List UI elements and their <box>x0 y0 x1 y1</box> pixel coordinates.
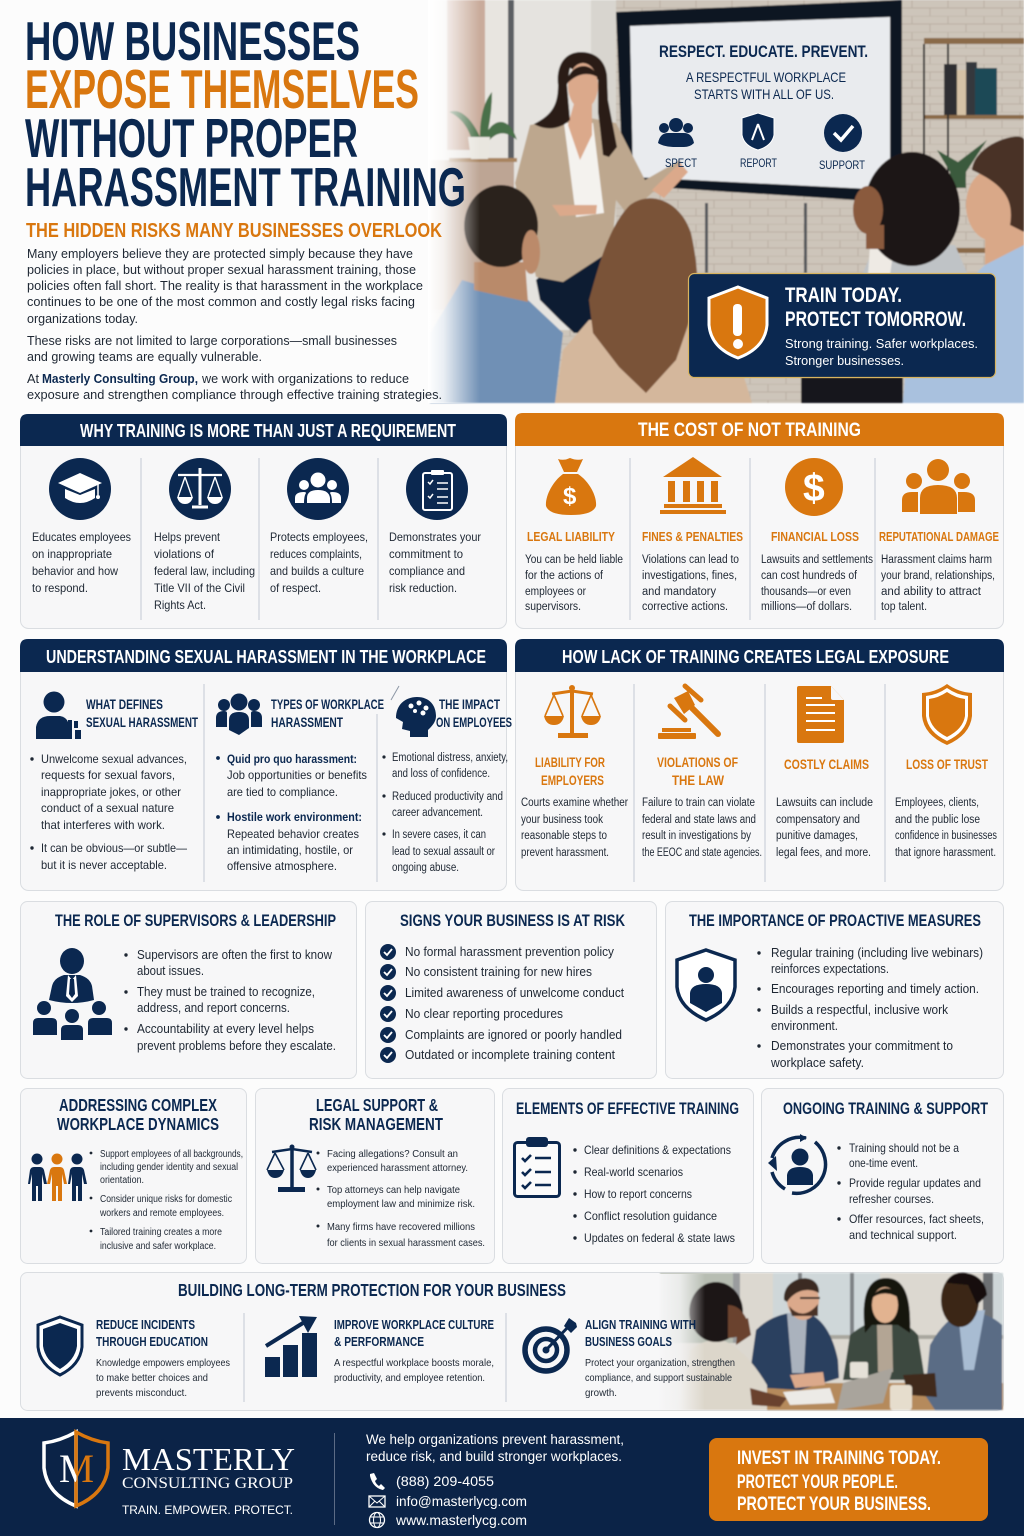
text blocks: Educates employees <box>32 530 131 544</box>
subheadings: HARASSMENT <box>271 715 344 730</box>
screen text and icons: STARTS WITH ALL OF US. <box>694 86 834 102</box>
icon: head with brain <box>396 697 436 737</box>
impact bullets: and loss of confidence. <box>392 768 490 780</box>
text blocks: confidence in businesses <box>895 830 997 842</box>
intro text: exposure and strengthen compliance through effective training strategies. <box>27 387 442 402</box>
harassment type bullets <box>216 752 367 873</box>
bullets: Tailored training creates a more <box>100 1227 222 1238</box>
audience: man on left <box>430 280 563 403</box>
heading: RISK MANAGEMENT <box>309 1114 443 1134</box>
icon: people <box>287 458 349 520</box>
bullets: Accountability at every level helps <box>137 1022 314 1036</box>
icon: target with arrow <box>525 1318 577 1371</box>
block: improve workplace culture: IMPROVE WORKPLACE CULTURE <box>334 1317 494 1332</box>
text blocks: your business took <box>521 814 603 826</box>
contact: email: info@masterlycg.com <box>396 1493 527 1509</box>
item titles: LOSS OF TRUST <box>906 757 989 772</box>
bullets: Regular training (including live webinars) <box>771 946 983 960</box>
panel: ongoing training and support <box>762 1088 1004 1264</box>
bullets: orientation. <box>100 1175 144 1186</box>
icon: circular arrows and person <box>768 1134 826 1193</box>
heading: ELEMENTS OF EFFECTIVE TRAINING <box>516 1099 739 1118</box>
text blocks: your brand, relationships, <box>881 570 995 582</box>
heading: THE ROLE OF SUPERVISORS & LEADERSHIP <box>55 911 336 930</box>
text blocks: legal fees, and more. <box>776 847 871 859</box>
bullets: Supervisors are often the first to know <box>137 948 333 962</box>
item titles: COSTLY CLAIMS <box>784 757 869 772</box>
item titles: VIOLATIONS OF <box>657 755 738 770</box>
title: WITHOUT PROPER <box>25 107 358 169</box>
panel: role of supervisors and leadership <box>20 902 356 1078</box>
item titles: FINANCIAL LOSS <box>771 529 859 544</box>
text blocks: thousands—or even <box>761 586 851 598</box>
presenter <box>536 213 612 333</box>
bullets: and technical support. <box>849 1228 957 1242</box>
screen text and icons: RESPECT. EDUCATE. PREVENT. <box>659 42 868 61</box>
definition bullets: Unwelcome sexual advances, <box>41 752 187 766</box>
impact bullets: ongoing abuse. <box>392 862 459 874</box>
text blocks: federal law, including <box>154 564 255 578</box>
icon: dollar coin: $ <box>803 467 825 510</box>
icon: person <box>36 692 81 739</box>
block: reduce incidents: Knowledge empowers employees <box>96 1357 230 1369</box>
heading: SIGNS YOUR BUSINESS IS AT RISK <box>400 911 626 930</box>
icon: diverse people <box>28 1154 87 1201</box>
impact bullets: In severe cases, it can <box>392 829 486 841</box>
subheadings <box>86 697 512 730</box>
hero photo: presenter training a team <box>430 0 1024 403</box>
icon: navy scales <box>267 1144 316 1192</box>
heading <box>309 1095 443 1134</box>
call to action <box>709 1438 988 1521</box>
checklist <box>380 944 624 1063</box>
icon: money bag: $ <box>563 483 577 510</box>
heading: LEGAL SUPPORT & <box>316 1095 438 1115</box>
bullets: How to report concerns <box>584 1187 692 1201</box>
block: improve workplace culture: A respectful workplace boosts morale, <box>334 1357 494 1369</box>
text blocks: Helps prevent <box>154 530 221 544</box>
icon: graduation cap <box>49 458 111 520</box>
text blocks: and the public lose <box>895 814 980 826</box>
text blocks: Lawsuits can include <box>776 797 873 809</box>
screen text and icons: SUPPORT <box>819 158 866 172</box>
screen text and icons <box>658 42 868 172</box>
bullets <box>573 1143 735 1245</box>
callout: train today: PROTECT TOMORROW. <box>785 308 966 331</box>
intro text: At <box>27 371 39 386</box>
callout: train today: Stronger businesses. <box>785 353 904 368</box>
bullets: prevent problems before they escalate. <box>137 1039 336 1053</box>
icon: warning shield <box>709 287 767 358</box>
harassment type bullets: Job opportunities or benefits <box>227 768 367 782</box>
panel: why training is more than a requirement <box>20 414 507 628</box>
intro text: These risks are not limited to large corporations—small businesses <box>27 333 397 348</box>
panel: how lack of training creates legal exposure <box>515 639 1004 890</box>
impact bullets <box>382 752 508 874</box>
text blocks: Courts examine whether <box>521 797 628 809</box>
harassment type bullets: an intimidating, hostile, or <box>227 843 353 857</box>
icon: group <box>216 694 262 735</box>
intro text: continues to be one of the most common and costly legal risks facing <box>27 294 415 309</box>
logo wordmark: CONSULTING GROUP <box>122 1475 293 1492</box>
checklist: Limited awareness of unwelcome conduct <box>405 986 624 1000</box>
text blocks: prevent harassment. <box>521 847 609 859</box>
block: reduce incidents: prevents misconduct. <box>96 1387 187 1399</box>
bullets: reinforces expectations. <box>771 962 889 976</box>
text blocks: risk reduction. <box>389 581 457 595</box>
block: improve workplace culture: & PERFORMANCE <box>334 1334 424 1349</box>
icon: orange scales <box>544 685 601 738</box>
intro text <box>27 246 442 402</box>
intro text: Many employers believe they are protected simply because they have <box>27 246 413 261</box>
screen text and icons: SPECT <box>665 156 698 170</box>
bullets: Real-world scenarios <box>584 1165 683 1179</box>
audience: woman from behind <box>555 317 752 403</box>
logo wordmark: MASTERLY <box>122 1441 295 1477</box>
icon: orange shield <box>922 684 972 745</box>
text blocks: Failure to train can violate <box>642 797 755 809</box>
man in grey suit <box>925 1311 1002 1410</box>
panel: building long-term protection <box>20 1272 1004 1410</box>
bullets: including gender identity and sexual <box>100 1162 238 1173</box>
text blocks: federal and state laws and <box>642 814 756 826</box>
tagline <box>366 1432 624 1464</box>
text blocks: Rights Act. <box>154 598 206 612</box>
bullets: experienced harassment attorney. <box>327 1162 468 1174</box>
bullets: Consider unique risks for domestic <box>100 1194 232 1205</box>
tagline: We help organizations prevent harassment, <box>366 1432 624 1447</box>
text blocks: punitive damages, <box>776 830 858 842</box>
item titles: FINES & PENALTIES <box>642 529 743 544</box>
tagline: reduce risk, and build stronger workplaces. <box>366 1449 622 1464</box>
panel: importance of proactive measures <box>666 902 1004 1078</box>
bullets: Demonstrates your commitment to <box>771 1039 953 1053</box>
definition bullets: It can be obvious—or subtle— <box>41 841 187 855</box>
text blocks: Violations can lead to <box>642 554 739 566</box>
bullets: for clients in sexual harassment cases. <box>327 1237 485 1249</box>
text blocks: compliance and <box>389 564 465 578</box>
impact bullets: career advancement. <box>392 807 483 819</box>
bullets: Conflict resolution guidance <box>584 1209 717 1223</box>
impact bullets: Reduced productivity and <box>392 791 503 803</box>
panel: elements of effective training <box>502 1088 754 1264</box>
table items <box>783 1388 835 1405</box>
text blocks: reasonable steps to <box>521 830 607 842</box>
subheadings: SEXUAL HARASSMENT <box>86 715 199 730</box>
subheadings: ON EMPLOYEES <box>436 715 512 730</box>
icon: scales <box>169 458 231 520</box>
audience: woman with curly hair <box>862 245 968 275</box>
subheadings: TYPES OF WORKPLACE <box>271 697 384 712</box>
call to action: PROTECT YOUR PEOPLE. <box>737 1472 898 1493</box>
panel: understanding sexual harassment <box>20 639 512 890</box>
bullets: address, and report concerns. <box>137 1001 290 1015</box>
icon: clipboard checklist <box>514 1137 560 1196</box>
block: reduce incidents: REDUCE INCIDENTS <box>96 1317 195 1332</box>
bullets: employment law and minimize risk. <box>327 1198 475 1210</box>
intro text: we work with organizations to reduce <box>201 371 409 386</box>
block: align training: ALIGN TRAINING WITH <box>585 1317 696 1332</box>
checklist: No consistent training for new hires <box>405 965 592 979</box>
team meeting photo <box>660 1273 1003 1410</box>
bullets <box>757 946 983 1070</box>
icon: money bag <box>546 458 596 515</box>
text blocks: Lawsuits and settlements <box>761 554 873 566</box>
bullets <box>124 948 336 1053</box>
harassment type bullets: Repeated behavior creates <box>227 827 359 841</box>
text blocks: and builds a culture <box>270 564 364 578</box>
bullets: Training should not be a <box>849 1141 959 1155</box>
call to action: INVEST IN TRAINING TODAY. <box>737 1448 941 1469</box>
icon: shield <box>38 1317 82 1375</box>
text blocks: Harassment claims harm <box>881 554 992 566</box>
bullets: Builds a respectful, inclusive work <box>771 1003 949 1017</box>
bullets: They must be trained to recognize, <box>137 985 315 999</box>
definition bullets: inappropriate jokes, or other <box>41 785 181 799</box>
icon: bank <box>660 457 726 514</box>
heading: WHY TRAINING IS MORE THAN JUST A REQUIREMENT <box>80 421 456 441</box>
right shelves <box>924 38 1024 44</box>
checklist: Outdated or incomplete training content <box>405 1048 615 1062</box>
item titles: THE LAW <box>672 773 724 788</box>
checklist: No formal harassment prevention policy <box>405 945 615 959</box>
title <box>25 10 466 218</box>
impact bullets: lead to sexual assault or <box>392 846 495 858</box>
bullets: inclusive and safer workplace. <box>100 1241 216 1252</box>
text blocks: to respond. <box>32 581 88 595</box>
heading: ADDRESSING COMPLEX <box>59 1095 217 1115</box>
intro text: policies in place, but without proper sexual harassment training, those <box>27 262 416 277</box>
bullets: Many firms have recovered millions <box>327 1221 475 1233</box>
callout: train today: Strong training. Safer workplaces. <box>785 336 978 351</box>
icon: checklist <box>406 458 468 520</box>
text blocks: reduces complaints, <box>270 547 362 561</box>
plant on left shelf <box>449 92 517 142</box>
text blocks: for the actions of <box>525 570 604 582</box>
text blocks: millions—of dollars. <box>761 601 852 613</box>
man with glasses <box>748 1313 839 1390</box>
subheading: THE HIDDEN RISKS MANY BUSINESSES OVERLOOK <box>26 220 442 242</box>
text blocks: Protects employees, <box>270 530 368 544</box>
text blocks: Title VII of the Civil <box>154 581 245 595</box>
bullets: refresher courses. <box>849 1192 934 1206</box>
logo wordmark <box>122 1441 295 1517</box>
screen text and icons: A RESPECTFUL WORKPLACE <box>686 69 846 85</box>
item titles: EMPLOYERS <box>541 773 604 788</box>
bullets: about issues. <box>137 964 204 978</box>
bullets: Offer resources, fact sheets, <box>849 1212 984 1226</box>
block: align training: BUSINESS GOALS <box>585 1334 672 1349</box>
harassment type bullets: offensive atmosphere. <box>227 859 337 873</box>
bullets: Provide regular updates and <box>849 1176 981 1190</box>
bullets: Support employees of all backgrounds, <box>100 1149 243 1160</box>
icon: protected person shield <box>677 950 735 1020</box>
item titles <box>535 755 989 788</box>
block: align training <box>585 1317 735 1399</box>
text blocks <box>32 530 481 612</box>
bullets: environment. <box>771 1019 838 1033</box>
text blocks: result in investigations by <box>642 830 751 842</box>
text blocks: on inappropriate <box>32 547 112 561</box>
block: align training: Protect your organization, strengthen <box>585 1357 735 1369</box>
bullets <box>316 1148 485 1249</box>
intro text: organizations today. <box>27 311 138 326</box>
block: reduce incidents <box>96 1317 230 1399</box>
definition bullets: requests for sexual favors, <box>41 768 175 782</box>
text blocks: can cost hundreds of <box>761 570 858 582</box>
block: align training: growth. <box>585 1387 617 1399</box>
call to action: PROTECT YOUR BUSINESS. <box>737 1494 931 1515</box>
callout: train today: TRAIN TODAY. <box>785 284 902 307</box>
text blocks: behavior and how <box>32 564 118 578</box>
intro text: and growing teams are equally vulnerable. <box>27 349 262 364</box>
intro text: Masterly Consulting Group, <box>42 371 198 386</box>
harassment type bullets: Hostile work environment: <box>227 810 362 824</box>
heading: WORKPLACE DYNAMICS <box>57 1114 219 1134</box>
title: EXPOSE THEMSELVES <box>25 58 419 120</box>
bullets: workplace safety. <box>770 1056 864 1070</box>
subheadings: THE IMPACT <box>439 697 501 712</box>
text blocks: the EEOC and state agencies. <box>642 847 762 859</box>
text blocks: Demonstrates your <box>389 530 481 544</box>
bullets <box>837 1141 984 1242</box>
text blocks <box>525 554 995 613</box>
audience: man on right <box>903 238 1024 403</box>
woman with curly hair <box>677 1340 767 1410</box>
bullets: one-time event. <box>849 1156 918 1170</box>
text blocks: top talent. <box>881 601 927 613</box>
icon: gavel <box>658 686 718 739</box>
text blocks: that ignore harassment. <box>895 847 996 859</box>
heading: BUILDING LONG-TERM PROTECTION FOR YOUR BUSINESS <box>178 1280 566 1300</box>
title: HOW BUSINESSES <box>25 10 360 72</box>
item titles: LIABILITY FOR <box>535 755 605 770</box>
definition bullets <box>30 752 187 872</box>
checklist: Complaints are ignored or poorly handled <box>405 1028 622 1042</box>
text blocks: employees or <box>525 586 586 598</box>
bullets: Encourages reporting and timely action. <box>771 982 979 996</box>
block: improve workplace culture <box>334 1317 494 1384</box>
bullets: Updates on federal & state laws <box>584 1231 735 1245</box>
contact: web: www.masterlycg.com <box>395 1512 527 1528</box>
block: reduce incidents: to make better choices and <box>96 1372 208 1384</box>
panel: the cost of not training <box>515 413 1004 628</box>
subheadings: WHAT DEFINES <box>86 697 163 712</box>
icon: leader and team <box>33 948 112 1040</box>
block: reduce incidents: THROUGH EDUCATION <box>96 1334 208 1349</box>
heading: THE COST OF NOT TRAINING <box>638 420 861 441</box>
bullets: Facing allegations? Consult an <box>327 1148 458 1160</box>
bullets: workers and remote employees. <box>99 1208 224 1219</box>
item titles <box>527 529 999 544</box>
definition bullets: that interferes with work. <box>41 818 165 832</box>
title: HARASSMENT TRAINING <box>25 156 466 218</box>
block: align training: compliance, and support sustainable <box>585 1372 732 1384</box>
text blocks: and mandatory <box>642 586 716 598</box>
panel: addressing complex workplace dynamics <box>20 1088 246 1264</box>
text blocks: violations of <box>154 547 215 561</box>
text blocks <box>521 797 997 859</box>
logo shield: M <box>59 1446 94 1491</box>
screen text and icons: REPORT <box>740 156 777 170</box>
item titles: LEGAL LIABILITY <box>527 529 615 544</box>
text blocks: You can be held liable <box>525 554 623 566</box>
text blocks: and ability to attract <box>881 586 982 598</box>
text blocks: of respect. <box>270 581 321 595</box>
icon: growth chart <box>265 1316 317 1377</box>
heading: UNDERSTANDING SEXUAL HARASSMENT IN THE WORKPLACE <box>46 646 486 667</box>
bullets <box>90 1149 243 1252</box>
definition bullets: conduct of a sexual nature <box>41 801 174 815</box>
impact bullets: Emotional distress, anxiety, <box>392 752 508 764</box>
heading <box>57 1095 219 1134</box>
text blocks: supervisors. <box>525 601 581 613</box>
harassment type bullets: Quid pro quo harassment: <box>227 752 357 766</box>
photo fade <box>655 1274 705 1410</box>
text blocks: corrective actions. <box>642 601 728 613</box>
text blocks: compensatory and <box>776 814 860 826</box>
photo left fade <box>428 0 480 403</box>
icon: document <box>797 686 844 743</box>
contact: phone: (888) 209-4055 <box>396 1473 494 1489</box>
footer <box>0 1418 1024 1536</box>
definition bullets: but it is never acceptable. <box>41 858 167 872</box>
text blocks: investigations, fines, <box>642 570 737 582</box>
smiling woman <box>843 1320 925 1380</box>
intro text: policies often fall short. The reality is that harassment in the workplace <box>27 278 423 293</box>
bullets: Top attorneys can help navigate <box>327 1184 460 1196</box>
checklist: No clear reporting procedures <box>405 1007 563 1021</box>
bullets: Clear definitions & expectations <box>584 1143 731 1157</box>
icon: people <box>902 459 975 514</box>
icon: dollar coin <box>785 458 843 516</box>
panel: legal support and risk management <box>256 1088 494 1264</box>
panel: signs your business is at risk <box>366 902 656 1078</box>
block: improve workplace culture: productivity, and employee retention. <box>334 1372 485 1384</box>
harassment type bullets: are tied to compliance. <box>227 785 338 799</box>
text blocks: commitment to <box>389 547 463 561</box>
text blocks: Employees, clients, <box>895 797 979 809</box>
logo shield <box>44 1432 108 1506</box>
logo wordmark: TRAIN. EMPOWER. PROTECT. <box>122 1503 293 1517</box>
callout: train today <box>688 274 996 378</box>
